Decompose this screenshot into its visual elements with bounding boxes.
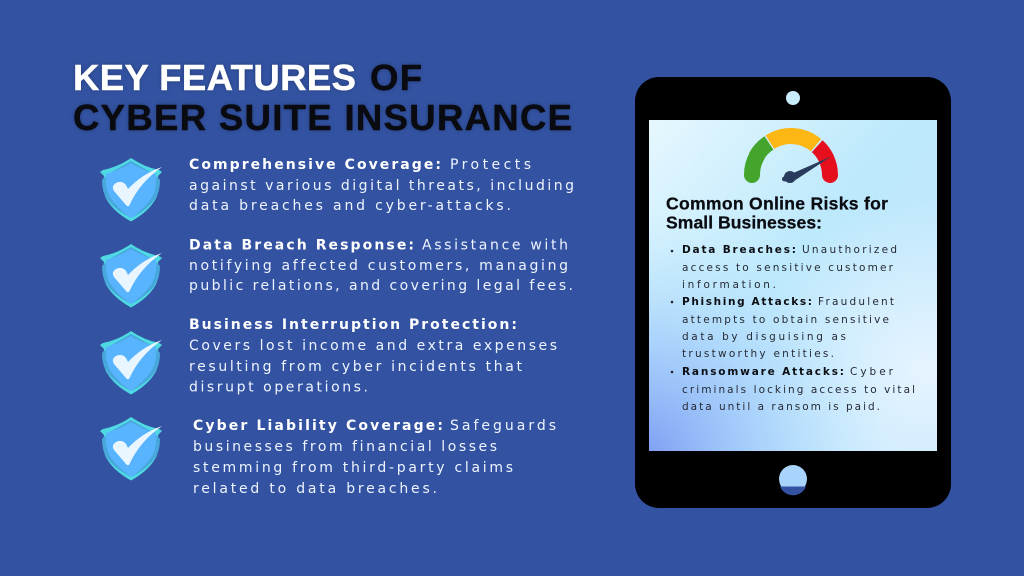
home button bbox=[779, 465, 807, 495]
text block: cyber liability coverage: businesses from financial losses bbox=[193, 439, 497, 455]
text block: data breach response: Data Breach Response: bbox=[189, 238, 414, 254]
text block: business interruption protection: Business Interruption Protection: bbox=[189, 317, 517, 333]
bullet: ransomware attacks: Cyber bbox=[850, 366, 894, 378]
text block: data breach response: Assistance with bbox=[422, 238, 568, 254]
text block: comprehensive coverage: data breaches and cyber-attacks. bbox=[189, 198, 511, 214]
title: CYBER SUITE INSURANCE bbox=[73, 97, 572, 138]
text block: business interruption protection: resulting from cyber incidents that bbox=[189, 359, 522, 375]
text block: cyber liability coverage: related to data breaches. bbox=[193, 481, 437, 497]
bullet: phishing attacks bbox=[671, 296, 894, 360]
screen heading: Common Online Risks for bbox=[666, 194, 888, 214]
bullet: ransomware attacks: criminals locking access to vital bbox=[682, 384, 915, 396]
icon: shield with check 1 bbox=[100, 158, 162, 222]
bullet: phishing attacks: Phishing Attacks: bbox=[682, 296, 812, 308]
title: KEY FEATURES bbox=[73, 57, 356, 98]
text block: comprehensive coverage: Protects bbox=[450, 157, 531, 173]
panel: tablet bbox=[635, 77, 951, 508]
bullet: ransomware attacks bbox=[671, 366, 915, 413]
text block: comprehensive coverage bbox=[189, 157, 574, 214]
text block: cyber liability coverage: Safeguards bbox=[450, 418, 556, 434]
text block: comprehensive coverage: against various digital threats, including bbox=[189, 178, 574, 194]
icon: shield with check 4 bbox=[100, 417, 162, 480]
tablet screen bbox=[649, 120, 937, 451]
bullet: phishing attacks: Fraudulent bbox=[818, 296, 894, 308]
text block: business interruption protection bbox=[189, 317, 557, 396]
bullet: ransomware attacks: Ransomware Attacks: bbox=[682, 366, 844, 378]
bullet: data breaches: Unauthorized bbox=[802, 244, 897, 256]
screen heading bbox=[666, 194, 888, 232]
icon: shield with check 3 bbox=[100, 331, 162, 394]
bullet: data breaches: Data Breaches: bbox=[682, 244, 796, 256]
bullet: data breaches: information. bbox=[682, 279, 776, 291]
title bbox=[73, 57, 572, 138]
text block: data breach response: notifying affected customers, managing bbox=[189, 258, 568, 274]
text block: cyber liability coverage: Cyber Liability Coverage: bbox=[193, 418, 443, 434]
bullet: data breaches: access to sensitive customer bbox=[682, 262, 894, 274]
text block: business interruption protection: Covers lost income and extra expenses bbox=[189, 338, 557, 354]
text block: cyber liability coverage: stemming from third-party claims bbox=[193, 460, 513, 476]
text block: data breach response bbox=[189, 238, 573, 294]
tablet body bbox=[635, 77, 951, 508]
bullet: phishing attacks: data by disguising as bbox=[682, 331, 846, 343]
bullet: phishing attacks: attempts to obtain sensitive bbox=[682, 314, 889, 326]
text block: data breach response: public relations, and covering legal fees. bbox=[189, 278, 573, 294]
gauge chart bbox=[752, 136, 831, 183]
text block: cyber liability coverage bbox=[193, 418, 556, 497]
text block: business interruption protection: disrupt operations. bbox=[189, 380, 368, 396]
bullet: ransomware attacks: data until a ransom is paid. bbox=[682, 401, 880, 413]
screen heading: Small Businesses: bbox=[666, 212, 822, 232]
bullet: phishing attacks: trustworthy entities. bbox=[682, 348, 834, 360]
camera bbox=[786, 91, 800, 105]
text block: comprehensive coverage: Comprehensive Coverage: bbox=[189, 157, 441, 173]
bullet: data breaches bbox=[671, 244, 897, 291]
title: OF bbox=[370, 57, 422, 98]
icon: shield with check 2 bbox=[100, 244, 162, 308]
